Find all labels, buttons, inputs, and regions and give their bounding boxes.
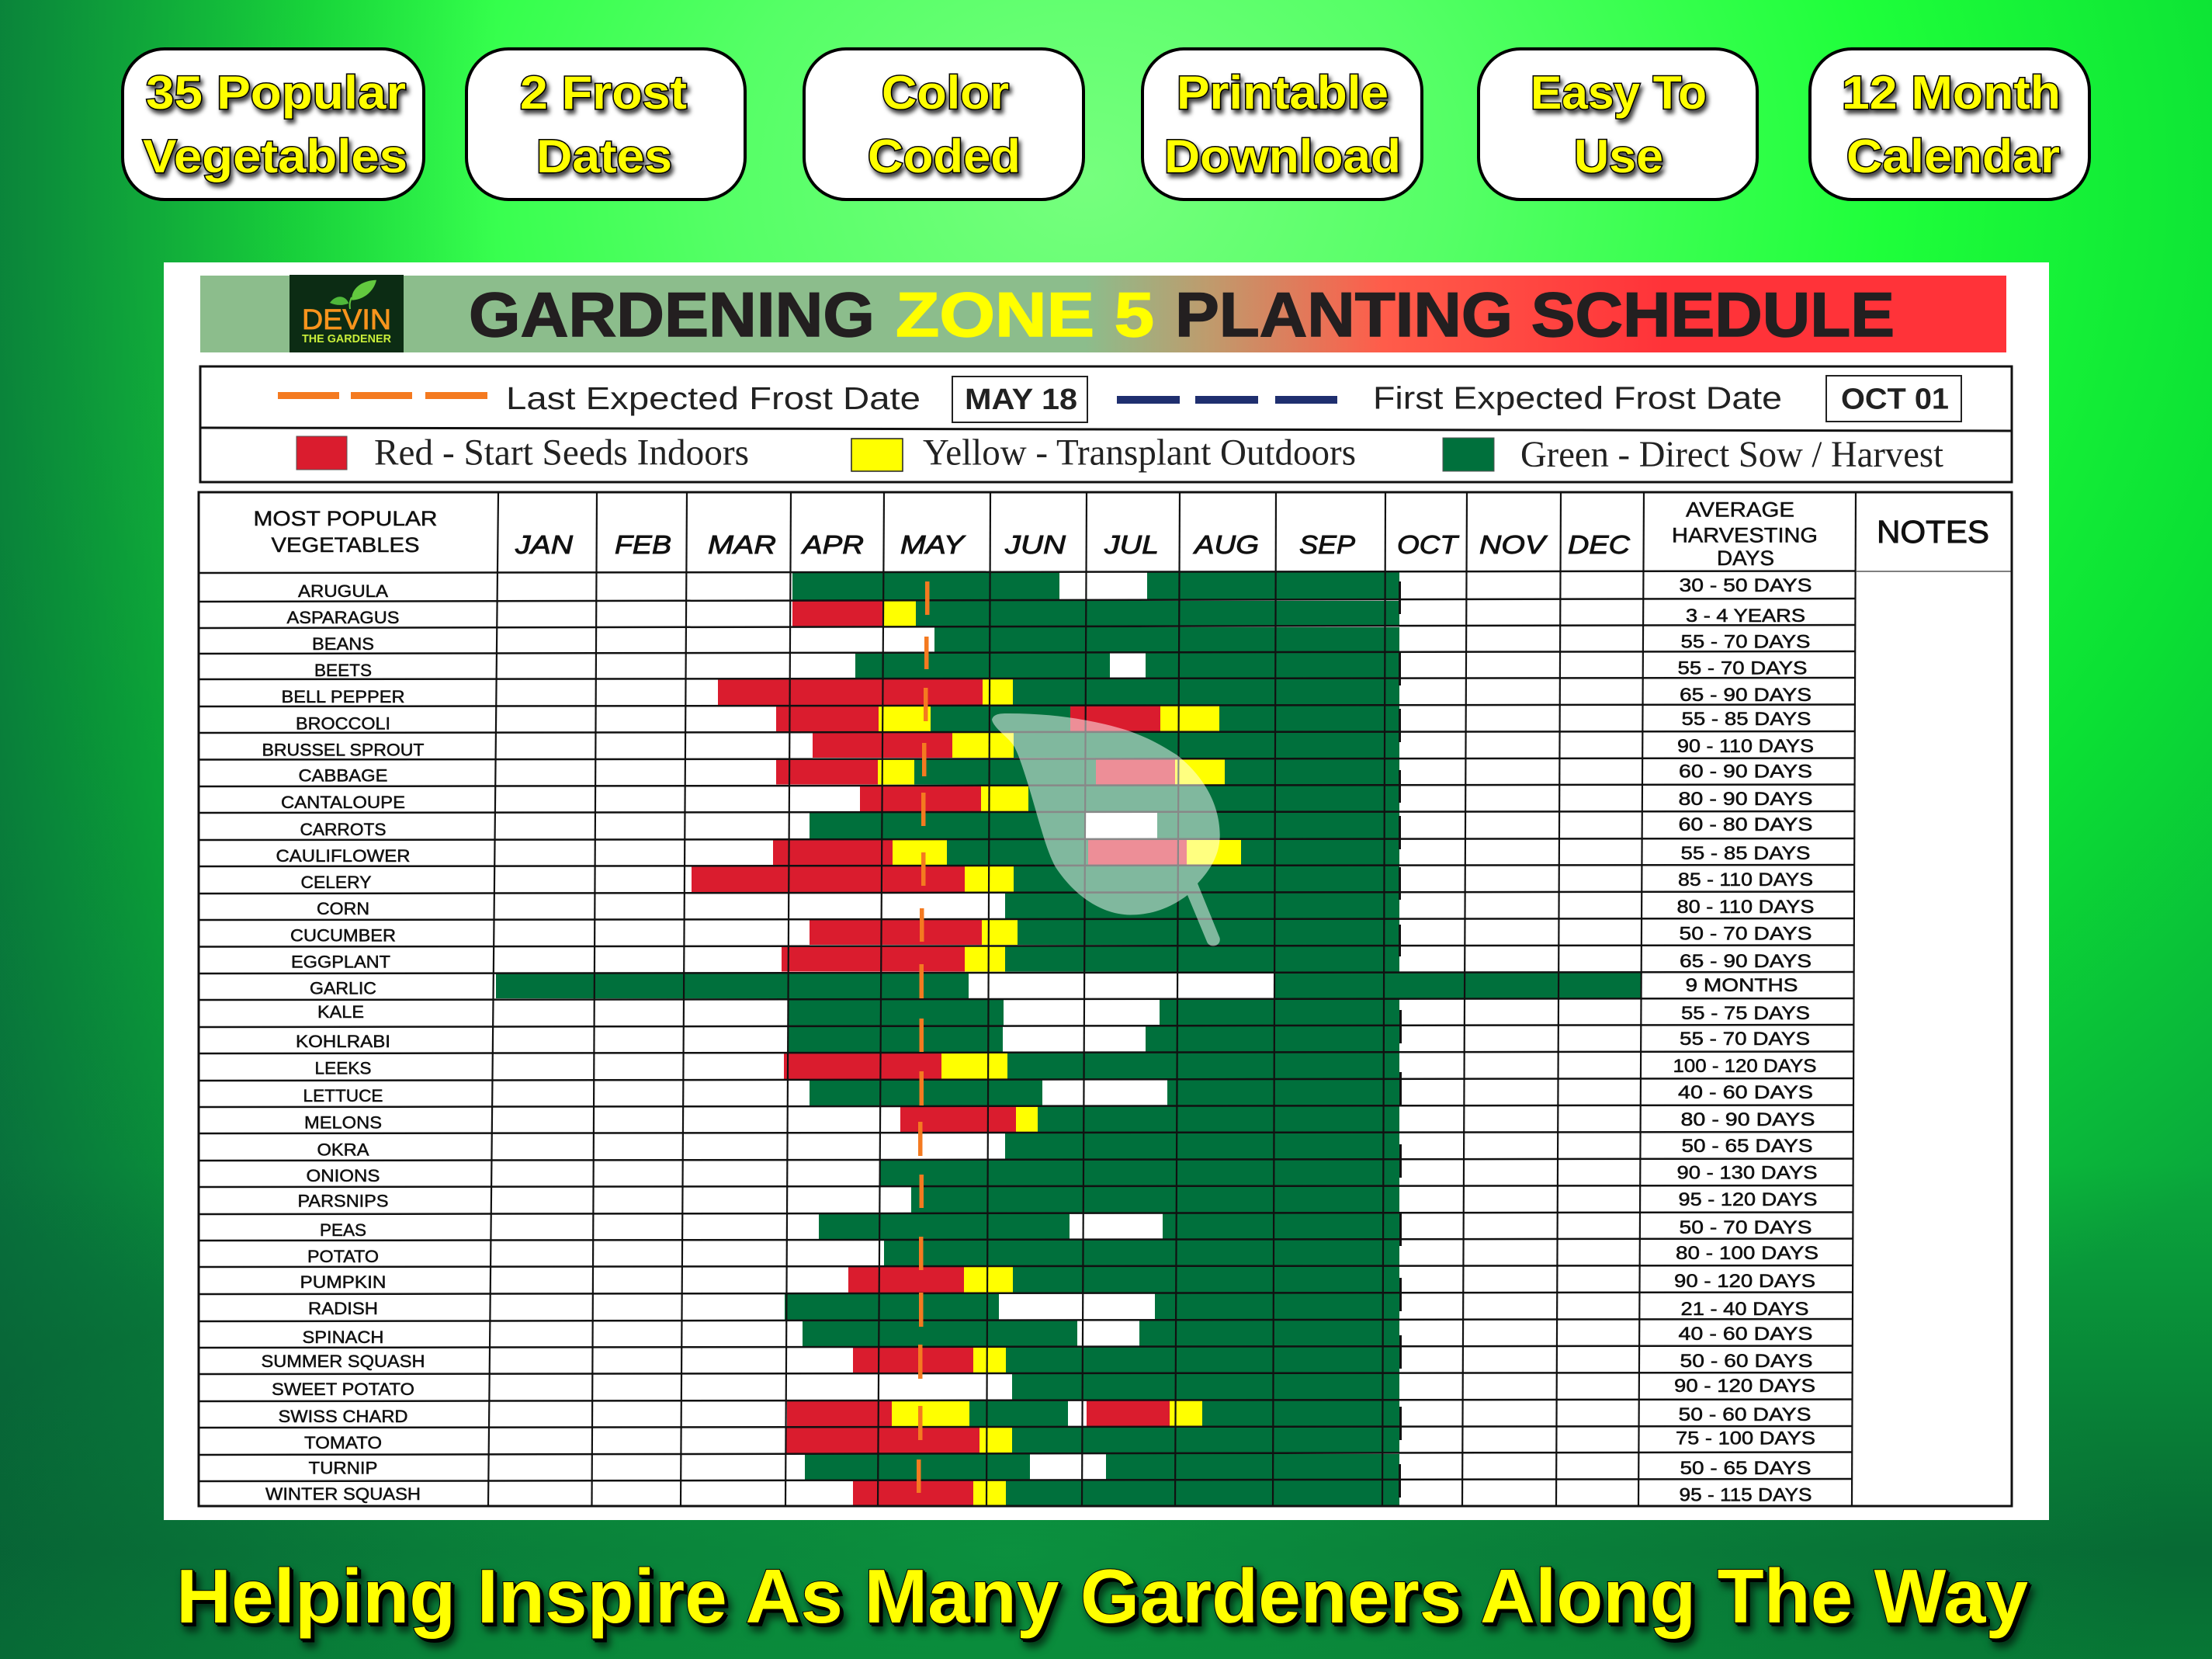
vegetable name column: TURNIP	[309, 1458, 377, 1478]
legend box	[200, 366, 2012, 482]
vegetable name column: BEANS	[312, 634, 374, 654]
average harvesting days column: 50 - 70 DAYS	[1680, 924, 1812, 944]
badge: Color Coded	[804, 49, 1083, 200]
vegetable name column: BRUSSEL SPROUT	[262, 741, 425, 759]
last frost date dashed line	[917, 581, 930, 1493]
average harvesting days column: 55 - 75 DAYS	[1681, 1003, 1810, 1024]
vegetable name column: LEEKS	[315, 1059, 371, 1078]
average harvesting days column: 95 - 115 DAYS	[1680, 1484, 1812, 1506]
average harvesting days column: 21 - 40 DAYS	[1681, 1299, 1808, 1320]
bar: Bell Pepper	[718, 679, 1399, 705]
vegetable name column: BELL PEPPER	[281, 687, 405, 706]
badge: Color Coded: Color	[882, 67, 1009, 119]
vegetable name column: SWEET POTATO	[272, 1380, 414, 1399]
bar: Cantaloupe	[860, 786, 1399, 811]
title text: ZONE 5	[896, 280, 1154, 350]
bar: Turnip	[805, 1454, 1399, 1480]
bar: Summer Squash	[853, 1347, 1399, 1373]
badge: 35 Popular Vegetables: Vegetables	[143, 130, 407, 182]
badge: 35 Popular Vegetables	[123, 49, 424, 200]
icon: leaf watermark	[992, 713, 1220, 946]
vegetable name column: WINTER SQUASH	[265, 1484, 421, 1504]
vegetable name column: ASPARAGUS	[287, 608, 399, 627]
average harvesting days column: 50 - 60 DAYS	[1680, 1351, 1813, 1372]
header: average harvesting days: AVERAGE	[1686, 498, 1794, 522]
panel: white chart sheet	[164, 262, 2049, 1520]
average harvesting days column: 85 - 110 DAYS	[1678, 869, 1813, 890]
bar: Asparagus	[792, 601, 1399, 626]
bar: Beans	[934, 627, 1399, 652]
bar: Pumpkin	[848, 1266, 1399, 1293]
average harvesting days column: 55 - 70 DAYS	[1681, 632, 1810, 652]
average harvesting days column: 65 - 90 DAYS	[1680, 685, 1812, 706]
bar: Spinach	[803, 1321, 1399, 1346]
bar: Kohlrabi	[788, 1026, 1399, 1052]
legend: first frost date	[1117, 376, 1961, 422]
bar: Broccoli	[776, 706, 1399, 731]
average harvesting days column: 95 - 120 DAYS	[1678, 1189, 1818, 1210]
vegetable name column: CORN	[317, 899, 369, 918]
header: months: FEB	[615, 530, 671, 559]
bar: Potato	[884, 1240, 1399, 1265]
header: notes: NOTES	[1877, 514, 1989, 550]
badge: 12 Month Calendar	[1810, 49, 2089, 200]
vegetable name column: ARUGULA	[298, 581, 388, 601]
bar: Arugula	[792, 572, 1399, 600]
badge: Easy To Use: Easy To	[1531, 67, 1707, 119]
average harvesting days column: 75 - 100 DAYS	[1676, 1428, 1815, 1449]
average harvesting days column: 80 - 110 DAYS	[1676, 897, 1815, 918]
average harvesting days column	[1673, 575, 1818, 1506]
header: months: NOV	[1479, 530, 1548, 559]
bar: Onions	[879, 1160, 1399, 1185]
legend: last frost date	[278, 377, 1087, 422]
average harvesting days column: 90 - 120 DAYS	[1674, 1376, 1815, 1397]
header: average harvesting days: HARVESTING	[1672, 523, 1818, 547]
bar: Celery	[692, 866, 1399, 892]
bar: Okra	[1005, 1133, 1399, 1159]
bar: Lettuce	[810, 1080, 1399, 1105]
bar: Cauliflower	[773, 839, 1399, 865]
logo: Devin The Gardener	[290, 275, 404, 352]
legend: last frost date: Last Expected Frost Date	[506, 380, 921, 416]
bar: Corn	[1005, 893, 1399, 918]
average harvesting days column: 80 - 90 DAYS	[1681, 1109, 1815, 1130]
badge: Printable Download: Printable	[1177, 67, 1389, 119]
vegetable name column: TOMATO	[304, 1433, 382, 1452]
header: months: JAN	[515, 530, 573, 559]
footer slogan: Helping Inspire As Many Gardeners Along The Way	[176, 1553, 2028, 1639]
vegetable name column: MELONS	[304, 1113, 382, 1132]
vegetable name column: CAULIFLOWER	[276, 846, 410, 866]
header: months: JUL	[1104, 530, 1159, 559]
vegetable name column: BROCCOLI	[296, 714, 390, 733]
badge: 2 Frost Dates: Dates	[536, 130, 672, 182]
vegetable name column: SPINACH	[303, 1328, 383, 1347]
average harvesting days column: 80 - 100 DAYS	[1676, 1243, 1818, 1264]
header: vegetables column: VEGETABLES	[272, 533, 419, 557]
badge: 12 Month Calendar: Calendar	[1846, 130, 2060, 182]
average harvesting days column: 50 - 65 DAYS	[1681, 1136, 1813, 1157]
vegetable name column: KOHLRABI	[296, 1032, 390, 1051]
vegetable name column: SWISS CHARD	[278, 1407, 408, 1426]
chart: planting bars	[496, 572, 1641, 1505]
vegetable name column: BEETS	[314, 661, 372, 680]
average harvesting days column: 50 - 65 DAYS	[1680, 1458, 1812, 1479]
title text: PLANTING SCHEDULE	[1175, 280, 1895, 350]
bar: Cabbage	[776, 759, 1399, 784]
legend: yellow key: Yellow - Transplant Outdoors	[923, 432, 1356, 474]
bar: Cucumber	[810, 919, 1399, 945]
bar: Swiss Chard	[787, 1400, 1399, 1426]
vegetable name column: CABBAGE	[298, 765, 388, 786]
vegetable name column: POTATO	[307, 1247, 379, 1266]
vegetable name column: CARROTS	[300, 820, 387, 839]
vegetable name column: CUCUMBER	[290, 925, 396, 946]
vegetable name column: GARLIC	[310, 978, 376, 998]
average harvesting days column: 40 - 60 DAYS	[1678, 1082, 1813, 1103]
bar: Beets	[855, 653, 1399, 679]
average harvesting days column: 90 - 120 DAYS	[1674, 1271, 1815, 1292]
logo: Devin The Gardener: THE GARDENER	[302, 333, 392, 345]
bar: Carrots	[810, 812, 1399, 838]
legend: last frost date: MAY 18	[965, 384, 1077, 416]
vegetable name column: RADISH	[308, 1299, 378, 1318]
title band	[200, 275, 2006, 352]
average harvesting days column: 30 - 50 DAYS	[1680, 575, 1812, 596]
header: months: SEP	[1299, 530, 1355, 559]
average harvesting days column: 90 - 130 DAYS	[1676, 1163, 1818, 1183]
vegetable name column: EGGPLANT	[291, 952, 390, 972]
badge: Easy To Use: Use	[1574, 130, 1663, 182]
header: months: AUG	[1193, 530, 1259, 559]
average harvesting days column: 55 - 85 DAYS	[1681, 843, 1810, 864]
bar: Eggplant	[782, 946, 1399, 972]
header: months: DEC	[1568, 530, 1631, 559]
title text	[469, 280, 1895, 350]
header: months: JUN	[1004, 530, 1066, 559]
header: vegetables column	[253, 507, 438, 557]
badge: Color Coded: Coded	[868, 130, 1021, 182]
bar: Kale	[788, 999, 1399, 1026]
header: months	[515, 530, 1631, 559]
vegetable name column: KALE	[317, 1002, 364, 1022]
bar: Peas	[819, 1213, 1399, 1239]
bar: Brussel Sprout	[813, 732, 1399, 758]
bar: Leeks	[784, 1053, 1399, 1079]
header: average harvesting days: DAYS	[1717, 547, 1774, 570]
bar: Garlic	[496, 973, 1641, 998]
average harvesting days column: 9 MONTHS	[1686, 975, 1798, 996]
header: average harvesting days	[1672, 498, 1818, 570]
vegetable name column: CANTALOUPE	[281, 793, 405, 812]
header: months: OCT	[1397, 530, 1460, 559]
average harvesting days column: 55 - 70 DAYS	[1680, 1029, 1810, 1050]
header: months: APR	[801, 530, 864, 559]
vegetable name column: SUMMER SQUASH	[261, 1352, 425, 1371]
badge: Printable Download	[1142, 49, 1422, 200]
header: months: MAY	[900, 530, 966, 559]
legend: green key: Green - Direct Sow / Harvest	[1520, 434, 1944, 475]
average harvesting days column: 40 - 60 DAYS	[1678, 1324, 1813, 1345]
table header labels	[253, 498, 1989, 570]
average harvesting days column: 80 - 90 DAYS	[1678, 789, 1813, 810]
average harvesting days column: 3 - 4 YEARS	[1686, 606, 1805, 626]
average harvesting days column: 90 - 110 DAYS	[1677, 736, 1814, 757]
bar: Radish	[785, 1293, 1399, 1320]
vegetable name column: ONIONS	[306, 1166, 380, 1185]
header: vegetables column: MOST POPULAR	[253, 507, 438, 530]
bar: Sweet Potato	[1012, 1373, 1399, 1400]
average harvesting days column: 100 - 120 DAYS	[1673, 1056, 1816, 1077]
vegetable name column: OKRA	[317, 1140, 369, 1160]
average harvesting days column: 55 - 85 DAYS	[1681, 709, 1812, 730]
bar: Melons	[900, 1106, 1399, 1132]
average harvesting days column: 60 - 90 DAYS	[1679, 761, 1812, 783]
vegetable name column: PEAS	[320, 1220, 366, 1240]
feature badges row	[123, 49, 2089, 200]
average harvesting days column: 65 - 90 DAYS	[1680, 951, 1812, 972]
title text: GARDENING	[469, 280, 875, 350]
badge: Easy To Use	[1479, 49, 1757, 200]
vegetable name column	[261, 581, 425, 1504]
average harvesting days column: 55 - 70 DAYS	[1678, 658, 1807, 679]
first frost date dashed line	[1399, 581, 1402, 1498]
legend: first frost date: First Expected Frost Date	[1373, 380, 1782, 416]
vegetable name column: PUMPKIN	[300, 1272, 387, 1292]
badge: 2 Frost Dates: 2 Frost	[520, 67, 687, 119]
logo: Devin The Gardener: DEVIN	[302, 304, 391, 335]
average harvesting days column: 50 - 60 DAYS	[1678, 1404, 1812, 1425]
badge: 2 Frost Dates	[466, 49, 745, 200]
badge: 12 Month Calendar: 12 Month	[1842, 67, 2061, 119]
vegetable name column: LETTUCE	[303, 1086, 383, 1105]
legend: red key: Red - Start Seeds Indoors	[374, 432, 749, 474]
vegetable name column: PARSNIPS	[298, 1191, 388, 1211]
vegetable name column: CELERY	[301, 873, 371, 892]
badge: 35 Popular Vegetables: 35 Popular	[146, 67, 406, 119]
bar: Tomato	[786, 1427, 1399, 1453]
header: months: MAR	[708, 530, 776, 559]
legend: first frost date: OCT 01	[1841, 384, 1949, 416]
badge: Printable Download: Download	[1164, 130, 1401, 182]
average harvesting days column: 50 - 70 DAYS	[1680, 1217, 1812, 1238]
bar: Winter Squash	[853, 1480, 1399, 1505]
table grid	[199, 492, 2012, 1506]
average harvesting days column: 60 - 80 DAYS	[1678, 814, 1813, 835]
bar: Parsnips	[911, 1186, 1399, 1213]
